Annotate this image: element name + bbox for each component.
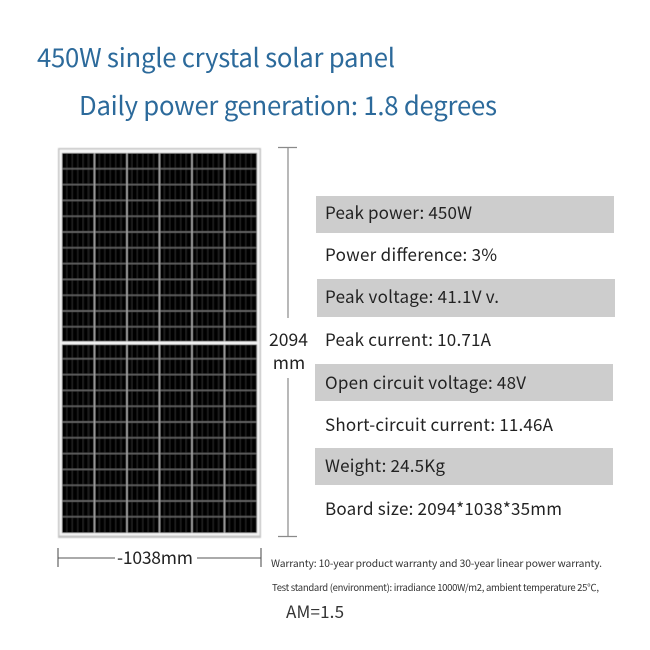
- subtitle: daily power generation: Daily power generation: 1.8 degrees: [79, 86, 497, 123]
- height dimension label: 2094: [269, 327, 308, 352]
- solar panel image: [58, 148, 261, 538]
- warranty note: Warranty: 10-year product warranty and 30-year linear power warranty.: [271, 555, 602, 570]
- width dimension label: -1038mm: [117, 545, 193, 570]
- spec row: weight: Weight: 24.5Kg: [325, 452, 445, 477]
- spec row: peak power: Peak power: 450W: [325, 199, 472, 224]
- spec row: power difference: Power difference: 3%: [325, 241, 497, 266]
- spec row: board size: Board size: 2094*1038*35mm: [325, 495, 562, 520]
- width dimension line: [58, 548, 261, 567]
- height dimension line: [278, 147, 297, 537]
- title: 450W single crystal solar panel: [37, 38, 395, 75]
- spec row: peak power: [316, 196, 614, 233]
- height dimension unit: mm: [273, 350, 305, 375]
- spec row: peak current: Peak current: 10.71A: [325, 326, 492, 351]
- air mass note: AM=1.5: [286, 598, 344, 623]
- spec row: weight: [315, 448, 613, 485]
- test standard note: Test standard (environment): irradiance 1000W/m2, ambient temperature 25℃,: [272, 580, 599, 594]
- spec row: open circuit voltage: Open circuit voltage: 48V: [325, 369, 526, 394]
- spec row: peak voltage: Peak voltage: 41.1V v.: [325, 283, 499, 308]
- spec row: peak voltage: [317, 279, 615, 317]
- spec row: short-circuit current: Short-circuit current: 11.46A: [325, 411, 554, 436]
- spec row: open circuit voltage: [315, 364, 613, 401]
